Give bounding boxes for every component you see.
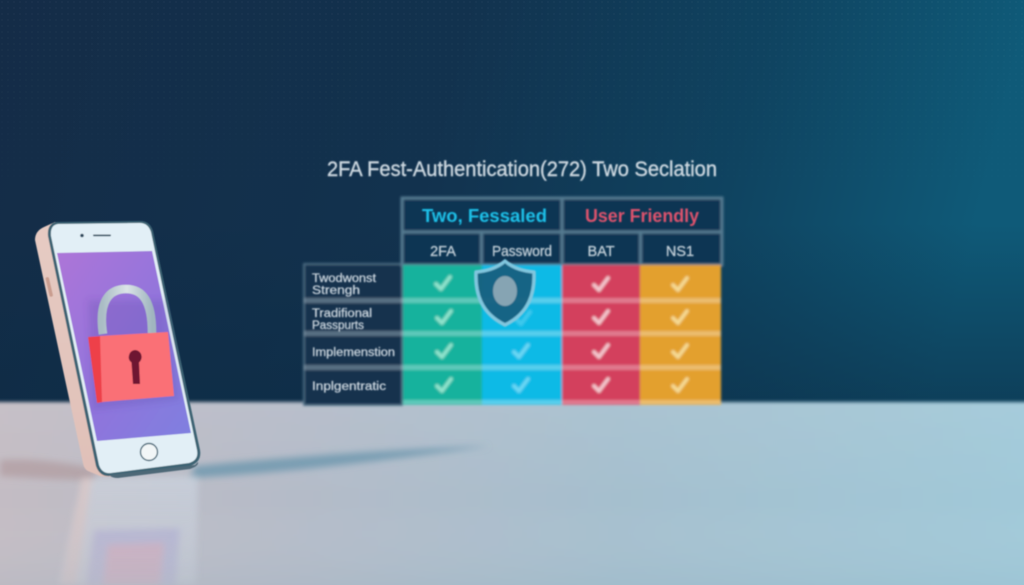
phone side edge — [35, 222, 120, 477]
table row labels: Twodwonst — [312, 273, 377, 285]
background wall — [464, 0, 1024, 402]
table group headings: User Friendly — [585, 205, 700, 226]
earpiece — [80, 234, 111, 237]
column: 2FA — [403, 265, 482, 405]
table row labels: Tradifional — [312, 308, 372, 320]
phone display — [57, 251, 191, 441]
table row labels: Implemenstion — [312, 347, 395, 359]
table row labels: Passpurts — [312, 320, 364, 332]
table group headings: Two, Fessaled — [422, 205, 547, 226]
table group headings — [422, 205, 700, 226]
phone reflection — [58, 476, 198, 585]
column: BAT — [562, 265, 640, 405]
panel: row label column — [304, 264, 402, 405]
shackle — [102, 289, 152, 334]
keyhole — [129, 350, 142, 384]
phone front glass — [51, 223, 197, 473]
row separators — [304, 298, 721, 405]
check marks: BAT — [594, 278, 608, 391]
icon: security shield with fingerprint — [476, 261, 534, 325]
column: Password — [482, 265, 562, 405]
table column headings: NS1 — [666, 244, 694, 260]
phone shadow on table — [0, 446, 490, 480]
padlock — [88, 289, 174, 403]
side button — [45, 277, 53, 297]
table row labels: Strengh — [312, 285, 360, 297]
table column headings — [430, 244, 694, 260]
check marks: NS1 — [673, 278, 687, 391]
panel: table header frame — [402, 198, 722, 265]
column: NS1 — [640, 265, 721, 405]
table column headings: Password — [492, 244, 552, 260]
check marks: 2FA — [436, 277, 451, 391]
home button — [140, 444, 158, 460]
padlock shadow — [88, 300, 180, 410]
table surface — [0, 402, 1024, 585]
table row labels: Inplgentratic — [312, 381, 386, 393]
table column headings: 2FA — [430, 244, 456, 260]
fingerprint — [493, 276, 517, 306]
title: 2FA Fest-Authentication(272) Two Seclation — [327, 157, 717, 181]
phone dark bezel — [48, 221, 200, 476]
lock front — [100, 332, 174, 402]
comparison table — [304, 198, 722, 405]
phone with padlock — [35, 221, 200, 478]
lock side — [88, 336, 103, 403]
phone base — [109, 462, 198, 478]
table row labels — [312, 273, 395, 393]
check marks: Password — [514, 312, 530, 391]
table column headings: BAT — [587, 244, 615, 260]
